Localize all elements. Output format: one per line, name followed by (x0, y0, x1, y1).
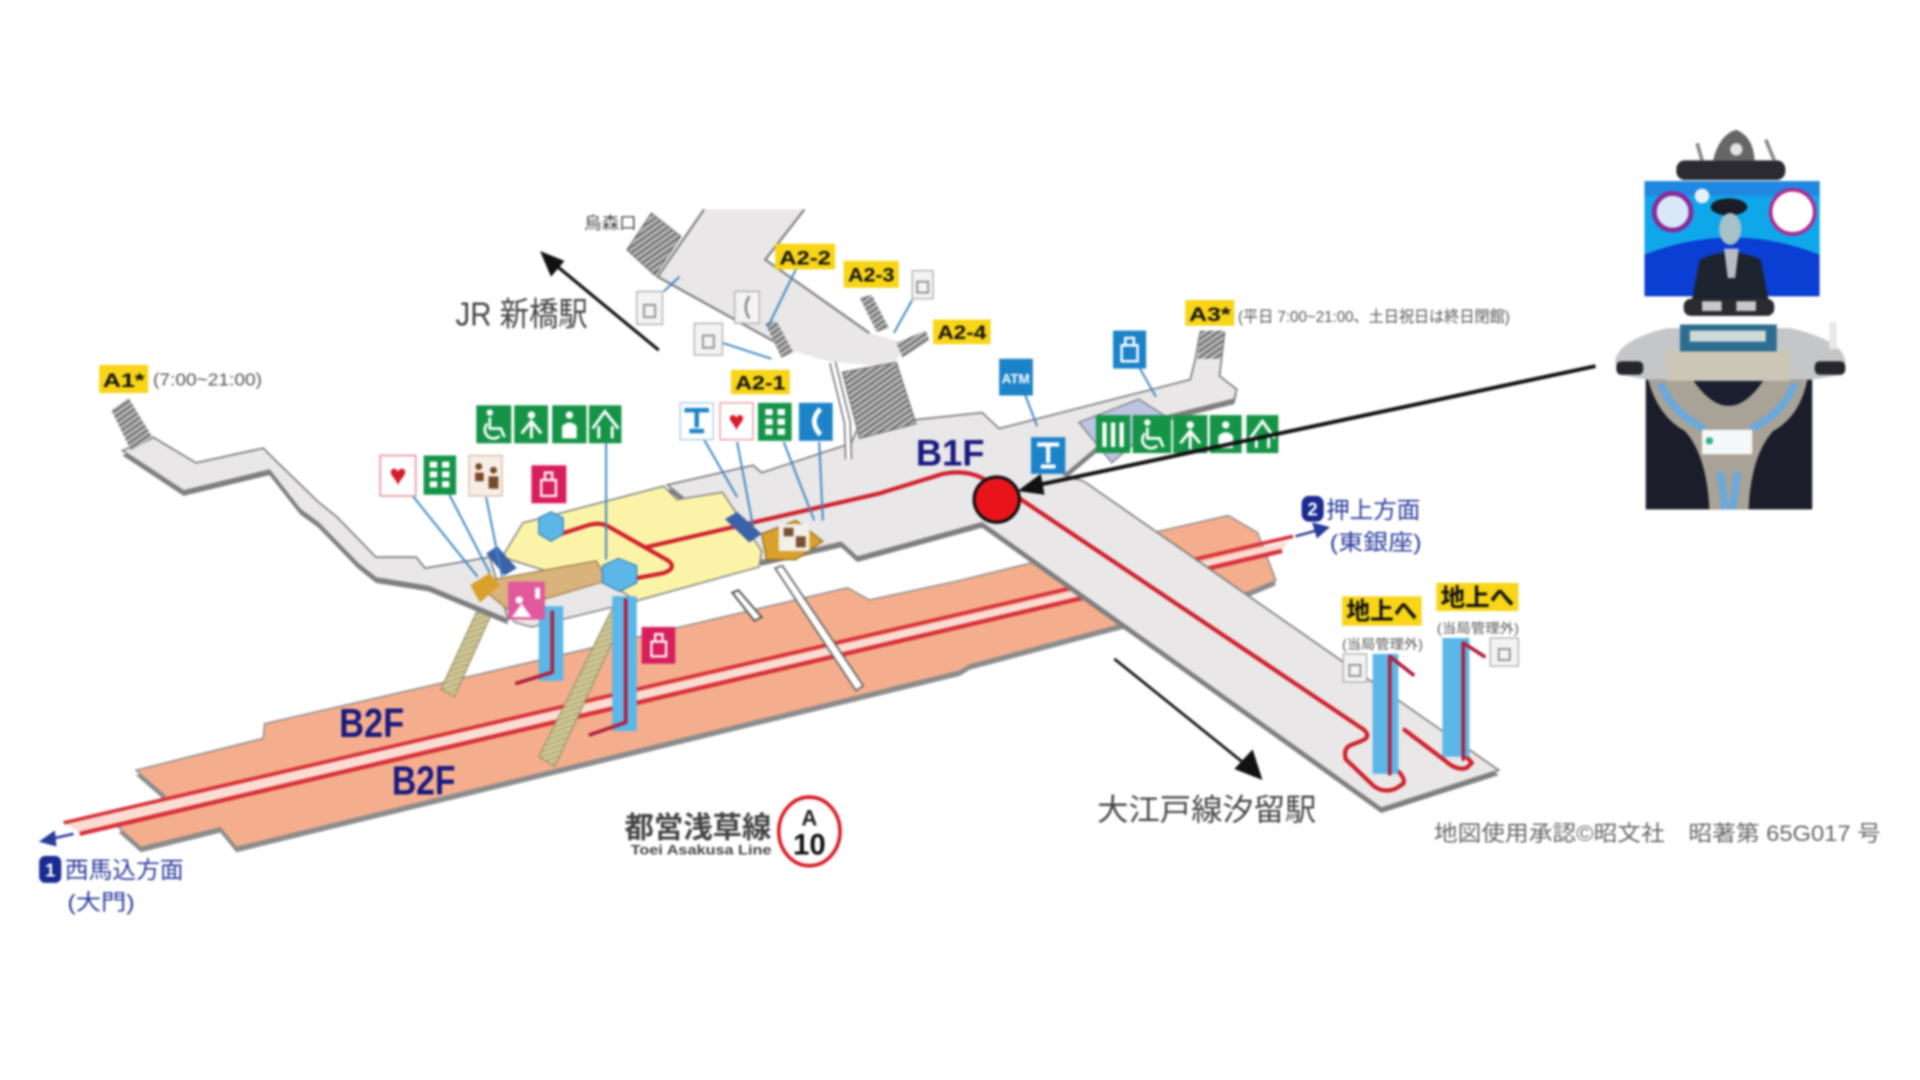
icon: crimson lockers upper (531, 465, 566, 503)
B2F upper label: B2F (339, 700, 404, 746)
B2F lower label: B2F (392, 758, 456, 804)
icon: AED left (380, 456, 416, 496)
line name: 都営浅草線 (624, 812, 771, 845)
route to Oedo corridor (645, 472, 1404, 791)
leader lines (413, 269, 1156, 577)
elevator left route (517, 612, 552, 683)
station number badge: A (801, 805, 817, 830)
red location marker (974, 477, 1019, 522)
A3 stairs (1198, 331, 1224, 359)
icon: green keypad left (424, 456, 456, 495)
JR Shimbashi label: JR 新橋駅 (456, 297, 588, 334)
A1 hours: (7:00~21:00) (153, 370, 262, 390)
icon: gray lockers 3 (912, 271, 933, 299)
direction: Oshiage (1296, 496, 1422, 555)
exit label A3: A3* (1189, 304, 1231, 326)
route on concourse (553, 524, 672, 580)
orange corner (470, 573, 500, 602)
direction: Nishi-magome: 1 (45, 860, 55, 881)
exit label A2-2: A2-2 (779, 247, 831, 269)
elevator A route (1390, 656, 1413, 774)
A3 hours: (平日 7:00~21:00、土日祝日は終日閉館) (1238, 308, 1510, 326)
icon: AED A2: ♥ (729, 406, 745, 436)
A2-1 stairs (765, 321, 793, 358)
exit label A2-3: A2-3 (848, 265, 895, 287)
direction: Nishi-magome (39, 833, 184, 915)
ground access label 2: 地上へ (1441, 584, 1514, 612)
elevator B route (1463, 643, 1484, 759)
yellow paid area (502, 486, 762, 602)
icon: ATM (999, 359, 1033, 396)
Karasumori stairs (627, 213, 681, 276)
map credit: 地図使用承認©昭文社 昭著第 65G017 号 (1434, 821, 1881, 846)
Nishi-magome arrow (42, 833, 73, 845)
elevator right A (1373, 654, 1413, 774)
station number badge: 10 (793, 829, 826, 862)
exit label A2-2 (775, 244, 835, 269)
direction: Oshiage: (東銀座) (1330, 530, 1422, 555)
track rail upper (64, 536, 1293, 823)
exit label A2-4 (933, 320, 991, 344)
stair link inner (833, 362, 849, 459)
brown ticket band (475, 561, 607, 610)
icon: blue coin locker (1113, 331, 1146, 369)
mid passage strip (508, 580, 637, 627)
icon: AED left: ♥ (389, 459, 407, 492)
toilet area (1079, 399, 1166, 463)
icon group: green facilities left (476, 405, 621, 443)
dark blue stairs right (725, 512, 762, 542)
ground access label 2: (当局管理外) (1437, 621, 1519, 636)
A2-3 stairs (860, 295, 889, 332)
exit label A2-4: A2-4 (937, 322, 986, 344)
icon: brown staff (469, 456, 502, 496)
direction: Nishi-magome: 西馬込方面 (65, 857, 184, 883)
station number badge (779, 797, 840, 866)
ground access label 1: 地上へ (1346, 598, 1417, 626)
icon: ATM: ATM (1002, 371, 1030, 386)
B1F label: B1F (916, 432, 984, 473)
icon: pink restroom (508, 582, 545, 620)
elevator left (517, 606, 563, 683)
route second elevator (1404, 730, 1472, 769)
icon: blue telephone A2 (680, 403, 713, 440)
Oedo Shiodome label: 大江戸線汐留駅 (1097, 793, 1316, 827)
B2F platform level (64, 516, 1293, 852)
icon: AED A2 (720, 403, 753, 440)
A1 stairs (111, 398, 153, 451)
Oshiage arrow (1296, 524, 1327, 536)
icon: gray lockers 1 (637, 291, 662, 324)
elevator centre route (590, 600, 626, 735)
B1F main concourse and Oedo corridor (667, 331, 1499, 813)
icon: crimson lockers lower (642, 627, 675, 664)
arrow to JR Shimbashi (540, 251, 659, 350)
exit label A1 (99, 365, 148, 393)
icon: gray lockers 5 (1490, 638, 1518, 666)
kiosk desk (1615, 322, 1845, 381)
orange facility block (762, 520, 823, 560)
olive stair left (441, 610, 492, 697)
A2 block edges (658, 209, 869, 350)
exit label A2-1: A2-1 (735, 372, 786, 394)
exit label A2-3 (844, 261, 899, 288)
dark blue stairs left (486, 546, 517, 576)
kiosk illustration (1615, 130, 1845, 509)
elevator cap centre (602, 558, 637, 591)
exit label A3 (1185, 300, 1234, 326)
Karasumori exit label: 烏森口 (584, 213, 637, 233)
track rail lower (80, 551, 1282, 834)
line name roman: Toei Asakusa Line (631, 842, 772, 858)
icon group: green toilets B1F (1096, 415, 1278, 453)
white stair short (732, 590, 762, 621)
ground access label 2 (1436, 583, 1519, 636)
icon: green keypad A2 (758, 403, 792, 441)
olive stair centre (539, 596, 632, 767)
exit label A1: A1* (103, 370, 145, 392)
kiosk base (1646, 380, 1812, 509)
direction: Oshiage: 押上方面 (1326, 497, 1420, 523)
A1 passage (111, 398, 508, 624)
icon: gray phone (735, 291, 759, 323)
kiosk screen (1644, 181, 1820, 296)
arrow to Oedo line (1114, 659, 1262, 780)
A2-4 stairs (896, 331, 929, 358)
ground access label 1: (当局管理外) (1342, 637, 1423, 652)
central wide stairs (842, 362, 916, 438)
stair link outline (833, 362, 849, 459)
elevator centre (590, 596, 637, 735)
ground access label 1 (1342, 596, 1423, 652)
white stair long (775, 566, 863, 691)
direction: Nishi-magome: (大門) (67, 890, 135, 915)
icon: blue phone (799, 403, 833, 441)
kiosk avatar (1684, 198, 1774, 316)
elevator cap left (539, 512, 563, 541)
direction: Oshiage: 2 (1308, 499, 1318, 520)
exit label A2-1 (731, 370, 790, 394)
main arrow to marker (1018, 366, 1596, 495)
kiosk top unit (1676, 130, 1785, 180)
A2 concourse block (627, 209, 929, 459)
elevator right B (1442, 638, 1484, 759)
icon: gray lockers 4 (1343, 654, 1367, 682)
icon: blue telephone B1F (1031, 437, 1065, 474)
track band (66, 541, 1288, 833)
icon: gray lockers 2 (694, 323, 722, 355)
